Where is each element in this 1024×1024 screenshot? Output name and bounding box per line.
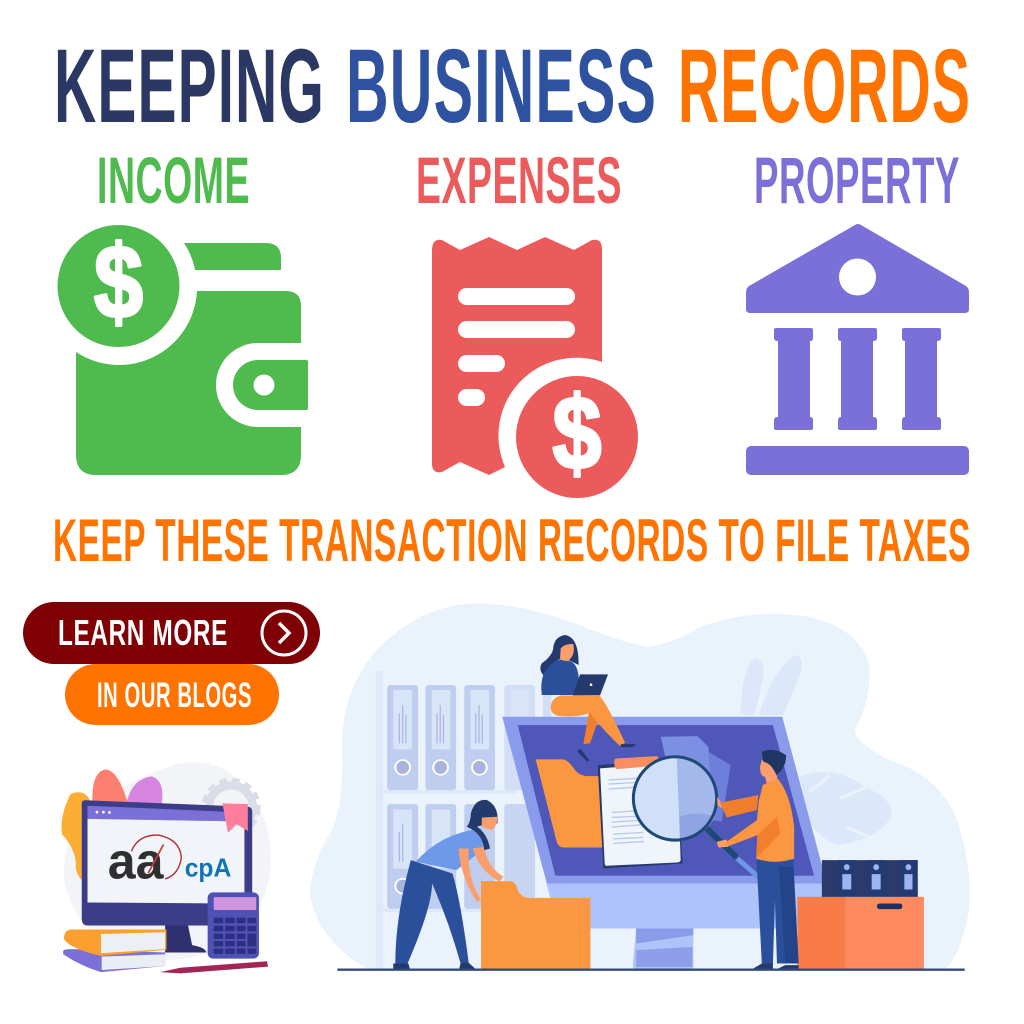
button: in our blogs: IN OUR BLOGS: [97, 676, 252, 715]
logo: aa: [108, 832, 164, 889]
icon: bank building: [746, 224, 969, 475]
logo: [108, 832, 231, 889]
heading: income: INCOME: [97, 143, 250, 217]
ground line: [337, 969, 965, 971]
leaves: [740, 655, 892, 845]
illustration: team managing records at a large monitor: [310, 603, 970, 971]
icon: receipt with dollar coin: [432, 237, 638, 498]
man upper body: [717, 750, 786, 847]
binders on box: [822, 860, 918, 897]
storage box: [797, 897, 924, 970]
title: [54, 28, 971, 145]
calculator: [208, 892, 259, 959]
icon: receipt with dollar coin: $: [552, 376, 602, 492]
open folder box: [481, 881, 590, 969]
button: learn more: [23, 602, 320, 664]
magnifying glass: [633, 757, 763, 881]
title: BUSINESS: [346, 28, 657, 145]
pencil: [160, 961, 268, 973]
icon: wallet with dollar coin: $: [94, 225, 143, 341]
logo: cpA: [185, 855, 231, 883]
man with magnifier lower body and sweater: [725, 778, 799, 970]
button: learn more: LEARN MORE: [58, 612, 228, 653]
shelf with binders: [376, 671, 551, 969]
title: KEEPING: [54, 28, 325, 145]
button: in our blogs: [65, 664, 279, 725]
illustration: computer with logo, books and calculator: [61, 762, 271, 973]
books: [63, 930, 166, 972]
big monitor: [502, 717, 837, 969]
background blob: [310, 603, 970, 969]
person bending with folder: [393, 800, 503, 970]
heading: expenses: EXPENSES: [416, 143, 622, 217]
folder on screen: [536, 759, 603, 847]
items on screen, drawn in monitor-crop coordinates: [536, 635, 786, 881]
clipboard: [598, 756, 683, 868]
documents behind magnifier: [661, 736, 731, 822]
icon: wallet with dollar coin: [58, 225, 308, 475]
person sitting with laptop: [540, 635, 636, 762]
